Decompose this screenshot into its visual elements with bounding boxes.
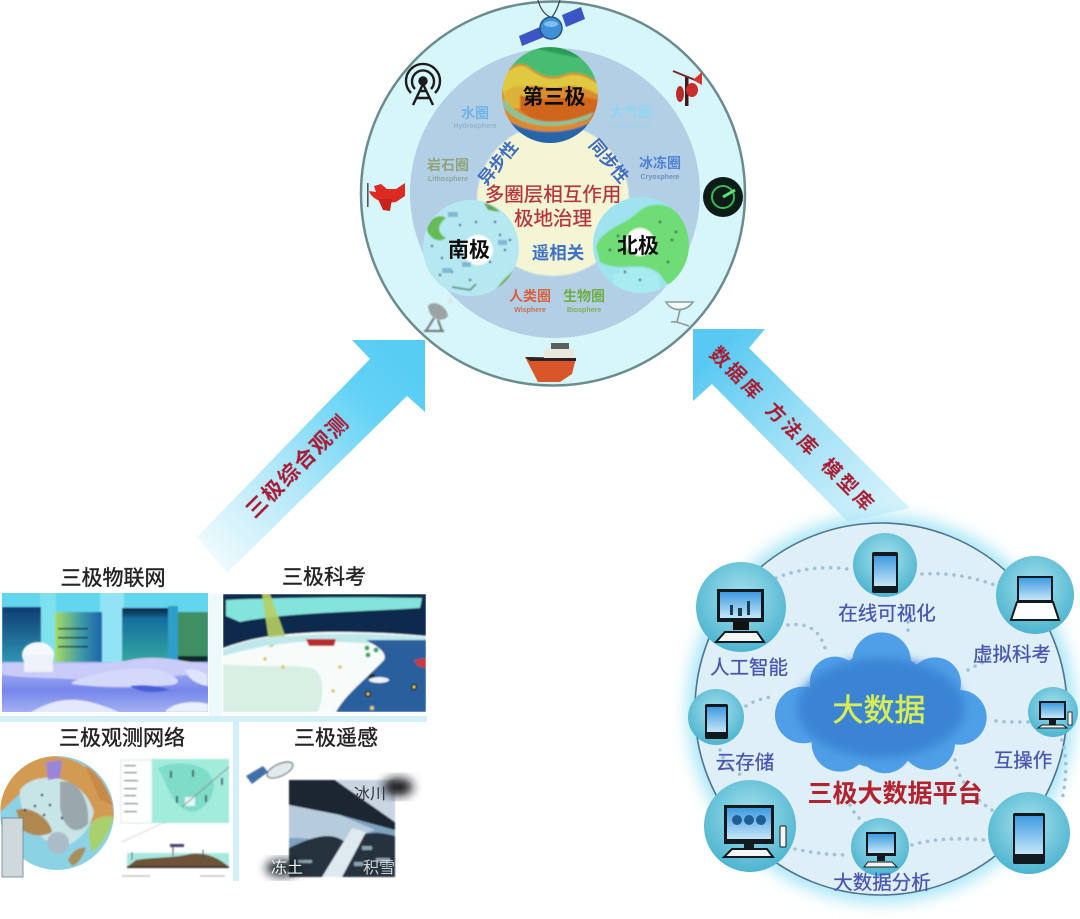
spheres labels: Biosphere xyxy=(567,307,601,314)
icon: anemometer xyxy=(673,71,702,106)
panel dividers xyxy=(0,594,427,881)
text: interaction and governance xyxy=(474,135,633,263)
spheres labels: 水圈 xyxy=(461,105,489,121)
heading: 三极科考: 三极科考 xyxy=(282,566,366,589)
chart: terrain profile xyxy=(122,822,229,876)
spheres labels: Lithosphere xyxy=(428,176,468,183)
spheres labels: Atmosphere xyxy=(611,123,652,130)
photo: expedition map xyxy=(223,594,426,712)
icon: red plane xyxy=(367,183,405,211)
icon: remote sensing satellite xyxy=(246,759,295,784)
icon: ship xyxy=(525,343,576,382)
text: interaction and governance: 遥相关 xyxy=(532,243,585,263)
node: virtual expedition xyxy=(996,556,1074,634)
node: tablet xyxy=(988,792,1070,874)
label: 大数据: 大数据 xyxy=(832,693,926,728)
node labels xyxy=(710,603,1052,894)
spheres labels: Wisphere xyxy=(514,307,546,314)
text: interaction and governance: 极地治理 xyxy=(514,208,592,230)
node labels: 大数据分析 xyxy=(833,872,931,894)
node: desktop xyxy=(704,780,796,872)
photo: polar bear on ice xyxy=(0,590,210,715)
legend box xyxy=(2,818,23,877)
node labels: 在线可视化 xyxy=(838,603,936,625)
map: arctic observation network xyxy=(0,755,116,877)
spheres labels xyxy=(427,104,681,314)
spheres labels: 大气圈 xyxy=(610,104,652,120)
node labels: 云存储 xyxy=(716,752,774,774)
arrow: observation to polar system xyxy=(197,340,425,573)
icon: satellite xyxy=(519,0,585,46)
connection dots xyxy=(720,568,1066,855)
icon: satellite dish left xyxy=(424,298,452,331)
spheres labels: 岩石圈 xyxy=(427,157,469,173)
icon: satellite dish right xyxy=(666,302,693,326)
photo: glacier, permafrost, snow xyxy=(266,778,413,877)
cloud: big data xyxy=(775,632,987,773)
node labels: 互操作 xyxy=(994,750,1052,772)
label: 南极: 南极 xyxy=(448,239,490,262)
label: 数据库 方法库 模型库: 数据库 方法库 模型库 xyxy=(705,342,881,517)
globe: antarctic xyxy=(423,200,519,296)
spheres labels: Cryosphere xyxy=(641,174,680,181)
heading: 三极观测网络: 三极观测网络 xyxy=(59,727,185,750)
node: data analysis xyxy=(851,818,909,876)
map: basin network xyxy=(121,759,229,823)
label: 第三极: 第三极 xyxy=(522,86,586,109)
icon: radio tower xyxy=(406,64,440,105)
panel: big data platform xyxy=(687,515,1078,903)
panel: multi-sphere polar circle xyxy=(361,0,745,386)
central cream disc xyxy=(477,124,629,276)
node labels: 虚拟科考 xyxy=(973,644,1051,666)
spheres labels: 人类圈 xyxy=(509,288,551,304)
platform title: 三极大数据平台 xyxy=(807,779,983,808)
node labels: 人工智能 xyxy=(710,657,788,679)
node: artificial intelligence xyxy=(696,562,786,652)
label: 三极综合观测: 三极综合观测 xyxy=(242,411,354,523)
label: 北极: 北极 xyxy=(617,235,659,258)
text: interaction and governance: 多圈层相互作用 xyxy=(485,184,621,206)
spheres labels: 冰冻圈 xyxy=(639,155,681,171)
globe: arctic xyxy=(593,197,689,293)
label: 冻土: 冻土 xyxy=(271,859,303,877)
node: interoperation xyxy=(1028,687,1078,737)
label: 冰川: 冰川 xyxy=(354,785,386,803)
text: interaction and governance: 异步性 xyxy=(474,137,522,189)
text: interaction and governance: 同步性 xyxy=(585,135,633,187)
spheres labels: 生物圈 xyxy=(563,288,605,304)
node: cloud storage xyxy=(688,689,744,745)
heading: 三极物联网: 三极物联网 xyxy=(60,567,166,590)
label: 积雪: 积雪 xyxy=(363,859,395,877)
spheres labels: Hydrosphere xyxy=(453,123,497,130)
heading: 三极遥感: 三极遥感 xyxy=(294,727,378,750)
node: online visualisation xyxy=(853,533,917,597)
sphere ring xyxy=(410,48,700,338)
arrow: data platform to polar system xyxy=(693,329,910,522)
globe: third pole xyxy=(500,45,600,146)
icon: radar xyxy=(703,177,743,217)
